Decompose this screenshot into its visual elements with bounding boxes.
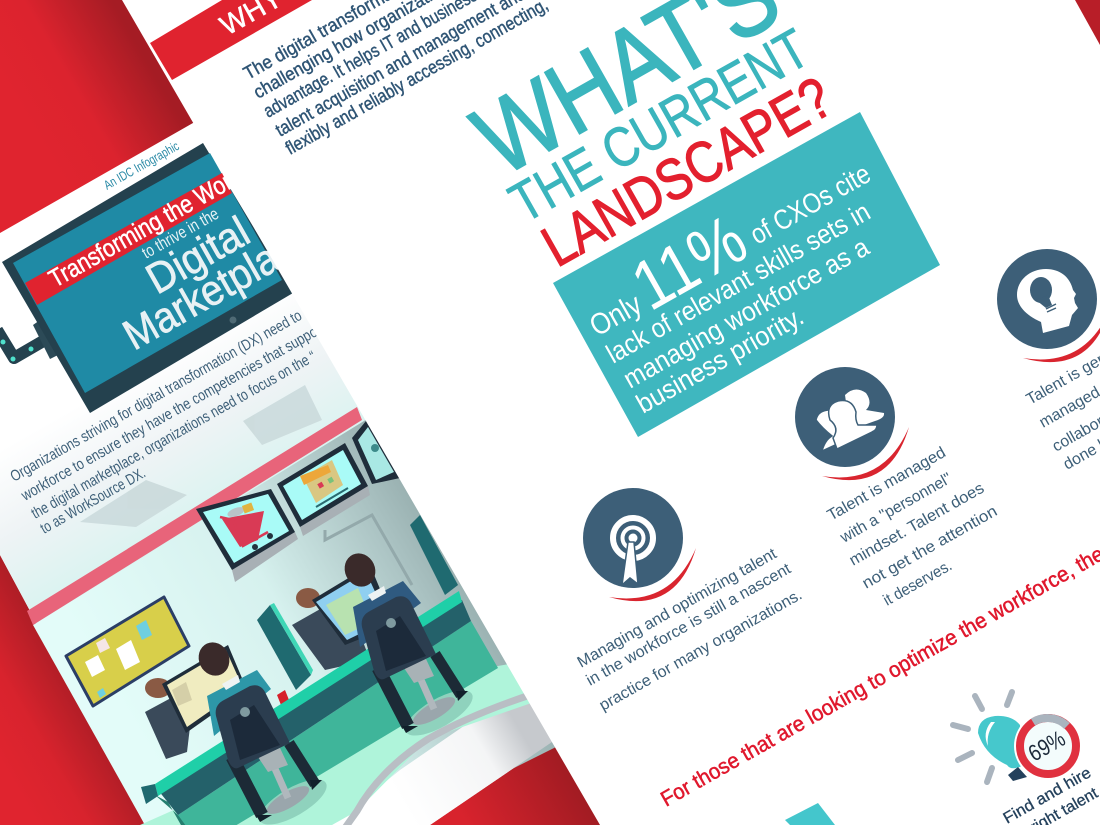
callout: 11% of CXOs: Only (584, 288, 647, 343)
monitor title text: Marketplace (115, 214, 323, 360)
back cubicle partition (257, 605, 311, 690)
text: personnel mindset: Talent is managed (825, 444, 949, 524)
icon: light bulb 69% (953, 692, 1082, 782)
person at back desk right (292, 565, 395, 670)
right cabinet (410, 515, 458, 595)
worker seated right (339, 548, 479, 744)
text: personnel mindset: mindset. Talent does (847, 480, 987, 569)
text: nascent practice: in the workforce is still a nascent (584, 560, 794, 689)
callout: 11% of CXOs: managing workforce as a (618, 231, 875, 394)
value: 69%: 69% (1024, 725, 1070, 766)
text: nascent practice: practice for many organizations. (597, 586, 805, 714)
ceiling lights (80, 385, 322, 527)
intro paragraph: to as WorkSource DX. (38, 465, 149, 537)
callout: 11% of CXOs: of CXOs cite (745, 158, 876, 250)
text: nascent practice: Managing and optimizing talent (575, 545, 780, 671)
monitor: web page (277, 443, 370, 536)
wall monitors (196, 421, 400, 582)
callout: 11% of CXOs (553, 112, 940, 437)
intro paragraph: Organizations striving for digital transformation (DX) need to (8, 307, 305, 485)
cork board (66, 597, 189, 706)
text: personnel mindset: not get the attention (860, 503, 1000, 592)
next section icon (cropped) (785, 803, 835, 825)
monitor title text: Transforming the Workforce (44, 139, 288, 293)
person at back desk left (145, 645, 289, 759)
worker seated left (193, 637, 333, 825)
title monitor (2, 139, 323, 413)
icon: people (795, 367, 909, 480)
icon: head with light bulb (997, 249, 1100, 362)
monitor: shopping cart (196, 489, 298, 582)
monitor title text (44, 139, 323, 360)
cable (325, 515, 412, 585)
monitor title text: to thrive in the (139, 204, 222, 262)
headline: What's the current landscape?: LANDSCAPE? (531, 65, 843, 279)
red band heading (150, 0, 317, 80)
intro paragraph: the digital marketplace, organizations need to focus on the “ (29, 348, 319, 522)
callout: 11% of CXOs: business priority. (631, 301, 809, 419)
wall bracket for monitor (0, 320, 58, 362)
floor (140, 660, 540, 825)
intro paragraph: workforce to ensure they have the competencies that support (18, 320, 328, 505)
panel: left infographic sheet (0, 62, 640, 825)
text: personnel mindset: with a "personnel" (837, 470, 955, 547)
small heading: An IDC Infographic: An IDC Infographic (101, 138, 182, 193)
callout: 11% of CXOs: lack of relevant skills sets in (601, 196, 875, 369)
monitor: partial (352, 421, 400, 484)
monitor title text: Digital (138, 208, 258, 304)
desk (141, 591, 498, 825)
icon: target ribbon (583, 488, 696, 601)
callout: 11% of CXOs: 11% (619, 200, 759, 325)
text: personnel mindset (825, 444, 1000, 609)
text: generally managed (1024, 331, 1100, 473)
text: nascent practice (575, 545, 805, 714)
text: personnel mindset: it deserves. (881, 557, 955, 609)
pink wall stripe (27, 407, 362, 625)
